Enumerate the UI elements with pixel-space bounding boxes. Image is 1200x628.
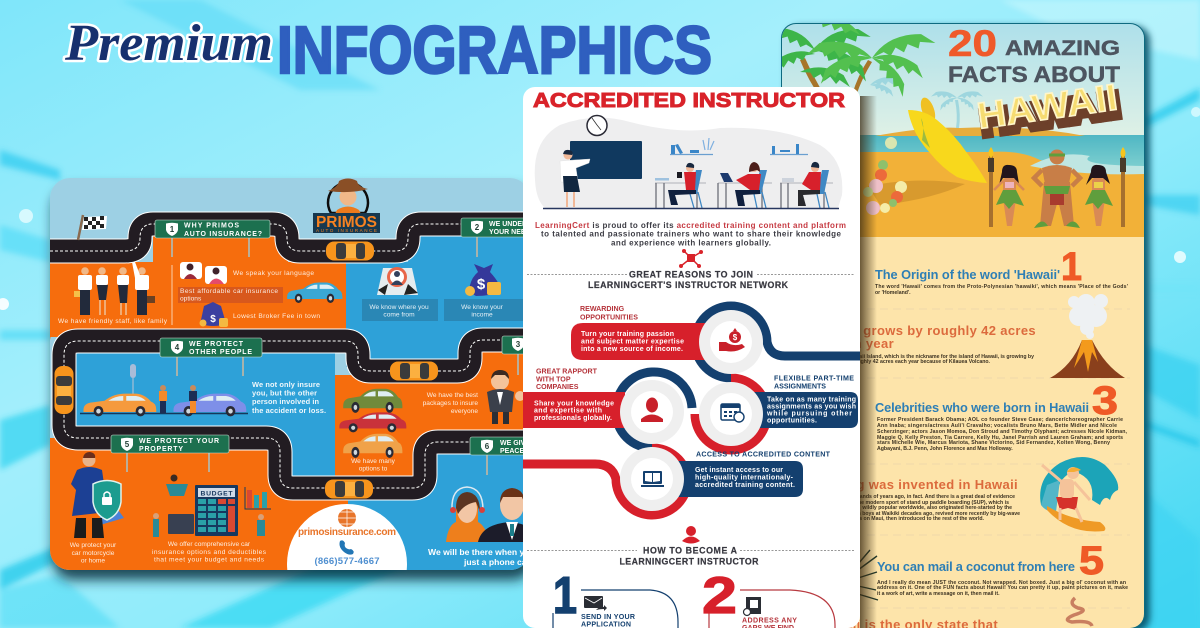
fact 3: Celebrities who were born in Hawaii <box>875 400 1089 415</box>
section heading: great reasons: GREAT REASONS TO JOIN <box>629 270 753 280</box>
caption: know your income <box>444 299 534 321</box>
superhero with shield <box>71 452 124 538</box>
sign 5: we protect your property <box>111 435 229 472</box>
fact 1 <box>875 252 1128 294</box>
sign 5: we protect your property: PROPERTY <box>139 446 183 453</box>
reason 1: rewarding opportunities: Turn your training passion <box>581 331 674 338</box>
fact 4: beach boys at Waikiki decades ago, revived more recently by big-wave <box>846 511 1020 517</box>
step 2: 2 <box>702 567 737 625</box>
fact 5: it a work of art, write a message on it, then mail it. <box>877 591 1000 597</box>
hula man <box>1034 150 1080 228</box>
sign 1: why Primos: AUTO INSURANCE? <box>184 231 262 238</box>
fact 3: Maggie Q, Kelly Preston, Tia Carrere, Kelly Hu, Janel Parrish and Lauren Graham; and sports <box>877 435 1123 441</box>
icon: parking sign <box>130 364 136 394</box>
section heading: how to become: LEARNINGCERT INSTRUCTOR <box>620 556 759 566</box>
reason 3: flexible part-time: assignments as you wish <box>767 404 856 410</box>
sea <box>860 135 1144 166</box>
student right <box>780 162 833 209</box>
colored blocks <box>50 235 540 575</box>
intro text <box>535 221 846 248</box>
sign 4: we protect other people <box>160 338 262 376</box>
flower lei <box>863 137 907 215</box>
icon: money bag <box>200 302 228 327</box>
reason 2: great rapport: GREAT RAPPORT <box>536 368 598 376</box>
icon: income bag: $ <box>477 276 486 293</box>
step 2: ADDRESS ANY <box>742 616 797 624</box>
icon: language avatars <box>180 262 227 284</box>
reason 1: rewarding opportunities: REWARDING <box>580 305 625 313</box>
fact 3: Agbayani, B.J. Penn, John Florence and Max Holloway. <box>877 446 1013 452</box>
icon: checkered flag <box>78 215 107 240</box>
fact 1: 1 <box>1061 245 1082 289</box>
benefits text <box>178 270 320 320</box>
panel: Hawaii facts <box>765 13 1144 628</box>
support caption: We will be there when you need us, <box>428 547 572 557</box>
Hawaii 3D lettering: HAWAII <box>978 84 1123 144</box>
website and phone badge: primosinsurance.com <box>298 527 396 538</box>
staff group <box>74 262 155 315</box>
options text: We have many <box>351 458 396 465</box>
section heading: great reasons <box>527 270 855 290</box>
other people text: We not only insure <box>252 380 320 389</box>
sign 3 <box>502 336 523 375</box>
icon: budget calculator <box>195 485 238 536</box>
fact 4 <box>860 480 1020 521</box>
sign 2: we understand your needs: YOUR NEEDS <box>489 229 536 236</box>
fact 1: or 'Homeland'. <box>875 290 911 296</box>
icon: surfer <box>1040 457 1118 532</box>
best packages text: everyone <box>451 408 478 415</box>
reason 1: rewarding opportunities: and subject matter expertise <box>581 338 684 346</box>
best packages text <box>423 392 478 415</box>
sand <box>860 152 1144 237</box>
budget caption: We offer comprehensive car <box>168 541 251 548</box>
icon: mail <box>584 596 607 611</box>
student left <box>655 163 706 209</box>
reason 2: great rapport: COMPANIES <box>536 383 579 391</box>
hero caption: car motorcycle <box>72 550 115 557</box>
section heading: great reasons: LEARNINGCERT'S INSTRUCTOR NETWORK <box>588 280 789 290</box>
logo: Primos auto insurance <box>313 178 380 233</box>
sign 2: we understand your needs <box>460 218 523 257</box>
fact 5: And I really do mean JUST the coconut. Not wrapped. Not boxed. Just a big ol' coconut with an <box>877 580 1126 586</box>
budget chart and people <box>153 474 271 537</box>
fact 4: that the modern sport of stand up paddle boarding (SUP), which is <box>845 500 1009 506</box>
icon: phone <box>340 540 354 555</box>
panel: accredited instructor <box>510 87 870 628</box>
other people text <box>252 380 326 415</box>
car options <box>339 389 406 458</box>
sign 6: we give you peace of mind: WE GIVE YOU <box>500 440 547 447</box>
other people text: person involved in <box>252 397 319 406</box>
tiki torches <box>988 147 1126 227</box>
reason 4: access to content: accredited training content. <box>695 482 795 489</box>
sign 4: we protect other people: WE PROTECT <box>189 341 244 348</box>
fact 4: wildly popular worldwide, also originated here-started by the <box>861 505 1012 511</box>
distant palms <box>870 77 983 128</box>
benefits text: We speak your language <box>233 270 314 277</box>
fact 5 <box>877 546 1128 596</box>
icon: person divider <box>682 526 700 544</box>
reason 3: flexible part-time <box>699 374 858 446</box>
website and phone badge <box>287 504 407 624</box>
intro text: and experience with learners globally. <box>611 238 771 248</box>
section heading: how to become: HOW TO BECOME A <box>643 546 738 556</box>
fact 3 <box>876 386 1127 451</box>
shelves <box>670 138 808 154</box>
hero caption <box>70 542 117 564</box>
budget caption: insurance options and deductibles <box>152 549 267 556</box>
sign 6: we give you peace of mind: 6 <box>485 442 490 451</box>
sign 6: we give you peace of mind <box>470 436 523 475</box>
floor line <box>543 208 839 210</box>
options text <box>351 458 396 472</box>
fact 5: address on it. One of the FUN facts about Hawaii! You can pretty it up, paint pictures on it, make <box>877 585 1128 591</box>
reason 1: rewarding opportunities <box>571 305 763 374</box>
website and phone badge: (866)577-4667 <box>314 556 380 567</box>
sign 5: we protect your property: 5 <box>125 440 130 449</box>
sign 3: 3 <box>516 340 521 349</box>
icon: squiggle <box>1067 598 1092 626</box>
best packages text: We have the best <box>427 392 478 399</box>
fact 1: The word 'Hawaii' comes from the Proto-Polynesian 'hawaiki', which means 'Place of the Gods' <box>875 284 1128 290</box>
icon: calendar <box>721 404 744 422</box>
fact 2 <box>860 326 1036 364</box>
reason 2: great rapport: WITH TOP <box>536 376 571 384</box>
reason 4: access to content: high-quality internationaly- <box>695 474 794 482</box>
reason 3: flexible part-time: while pursuing other <box>766 410 852 418</box>
heading 20 amazing facts about: AMAZING <box>1005 37 1120 60</box>
fact 5: You can mail a coconut from here <box>877 559 1075 574</box>
hero caption: We protect your <box>70 542 117 549</box>
benefits text: Best affordable car insurance <box>180 288 278 295</box>
fact 1: The Origin of the word 'Hawaii' <box>875 267 1060 282</box>
logo: Primos auto insurance: AUTO INSURANCE <box>316 228 377 233</box>
cream facts area <box>848 237 1144 628</box>
caption: where you come from: come from <box>383 312 415 318</box>
caption: where you come from: We know where you <box>369 304 429 311</box>
icon: document search <box>744 597 761 616</box>
icon: person <box>641 398 663 422</box>
reason 4: access to content: ACCESS TO ACCREDITED CONTENT <box>696 450 831 458</box>
icon: budget calculator: BUDGET <box>200 490 233 498</box>
icon: network <box>679 249 703 268</box>
fact 3: stars Michelle Wie, Marcus Mariota, Shane Victorino, Sid Fernandez, Kolten Wong, Benny <box>877 440 1110 446</box>
section heading: how to become <box>527 546 855 566</box>
fact 3: Scherzinger; actors Jason Momoa, Don Stroud and Timothy Olyphant; actresses Nicole Kidman, <box>877 429 1128 435</box>
fact 4: Surfing was invented in Hawaii <box>817 477 1018 492</box>
reason 4: access to content: Get instant access to our <box>695 467 783 474</box>
sign 2: we understand your needs: 2 <box>475 223 480 232</box>
reason 2: great rapport: professionals globally. <box>534 415 612 422</box>
sign 2: we understand your needs: WE UNDERSTAND <box>489 221 551 228</box>
icon: laptop book <box>641 471 664 487</box>
sign 5: we protect your property: WE PROTECT YOUR <box>139 438 219 445</box>
budget caption <box>152 541 267 564</box>
fact 3: 3 <box>1092 379 1118 423</box>
options text: options to <box>359 466 388 472</box>
icon: volcano <box>1050 294 1125 378</box>
fact 2: each year <box>831 336 894 351</box>
fact 4: surfers on Maui, then introduced to the rest of the world. <box>844 516 985 522</box>
fact 5: 5 <box>1079 539 1104 583</box>
step 1: SEND IN YOUR <box>581 613 635 621</box>
word INFOGRAPHICS: INFOGRAPHICS <box>277 13 712 88</box>
reason 3: flexible part-time: FLEXIBLE PART-TIME <box>774 374 854 382</box>
fact 4: Thousands of years ago, in fact. And there is a great deal of evidence <box>844 494 1015 500</box>
heading 20 amazing facts about: FACTS ABOUT <box>948 62 1121 87</box>
best packages text: packages to insure <box>423 400 478 407</box>
surfboard <box>868 96 987 205</box>
road cars <box>54 242 438 498</box>
sign 1: why Primos: WHY PRIMOS <box>184 222 239 230</box>
classroom illustration <box>535 116 842 209</box>
intro text: to talented and passionate trainers who want to share their knowledge <box>541 230 842 238</box>
other people text: you, but the other <box>252 388 317 398</box>
heading 20 amazing facts about: 20 <box>948 23 997 64</box>
reason 2: great rapport <box>523 368 684 444</box>
icon: money bag: $ <box>210 314 216 325</box>
sky <box>782 24 1144 138</box>
reason 3: flexible part-time: ASSIGNMENTS <box>774 382 826 390</box>
sign 1: why Primos <box>155 220 270 257</box>
reasons connector ribbon <box>510 306 870 515</box>
Hawaii 3D lettering: HAWAII <box>975 76 1120 137</box>
staff caption: We have friendly staff, like family <box>58 318 168 325</box>
logo: Primos auto insurance: PRIMOS <box>316 214 377 231</box>
agent character <box>487 370 525 424</box>
palm trees <box>782 24 936 97</box>
icon: globe <box>338 509 356 527</box>
script word Premium: Premium <box>64 15 273 72</box>
fact 2: roughly 42 acres each year because of Kilauea Volcano. <box>852 359 991 365</box>
heading 20 amazing facts about <box>949 30 1120 82</box>
step 1 <box>545 567 678 628</box>
caption: where you come from <box>362 299 438 321</box>
title: Premium Infographics <box>64 13 712 88</box>
reason 4: access to content <box>620 447 831 511</box>
reason 2: great rapport: and expertise with <box>534 408 602 414</box>
road <box>40 224 540 488</box>
shadow cast by middle panel <box>860 96 877 628</box>
benefits text: Lowest Broker Fee in town <box>233 313 320 320</box>
icon: income bag <box>465 264 501 296</box>
reason 3: flexible part-time: opportunities. <box>767 418 817 424</box>
sign 4: we protect other people: OTHER PEOPLE <box>189 349 252 356</box>
sign 4: we protect other people: 4 <box>175 343 180 352</box>
sign 1: why Primos: 1 <box>170 225 175 234</box>
sign 6: we give you peace of mind: PEACE OF MIND <box>500 448 556 455</box>
hula dancer right <box>1085 165 1113 226</box>
divider <box>171 265 173 325</box>
hula dancer left <box>994 165 1024 226</box>
support caption <box>428 547 572 567</box>
reason 1: rewarding opportunities: OPPORTUNITIES <box>580 314 638 322</box>
icon: plant <box>858 550 878 600</box>
icon: blue car <box>287 282 342 303</box>
reason 3: flexible part-time: Take on as many training <box>767 396 856 404</box>
step 2 <box>700 567 835 628</box>
blackboard <box>570 141 642 179</box>
other people text: the accident or loss. <box>252 406 326 415</box>
caption: know your income: income <box>471 312 493 318</box>
fact 3: Ann Inaba; singers/actress Auli'i Cravalho; vocalists Bruno Mars, Bette Midler and Nicole <box>877 423 1117 429</box>
teacher <box>560 150 590 207</box>
intro text: LearningCert is proud to offer its accredited training content and platform <box>535 221 846 230</box>
island <box>875 127 1085 136</box>
reason 2: great rapport: Share your knowledge <box>534 400 614 408</box>
fact 2: Hawaii Island, which is the nickname for the island of Hawaii, is growing by <box>849 354 1034 360</box>
clock <box>587 116 607 136</box>
dashed separators <box>867 309 1130 608</box>
icon: map with pin <box>377 267 418 295</box>
student middle <box>718 162 772 209</box>
hero caption: or home <box>81 558 105 564</box>
icon: money hand: $ <box>733 333 738 342</box>
caption: know your income: We know your <box>461 304 504 311</box>
accident scene <box>80 385 248 416</box>
heading: ACCREDITED INSTRUCTOR <box>533 89 845 112</box>
fact 2: Hawaii grows by roughly 42 acres <box>816 323 1036 338</box>
icon: support agents <box>446 487 540 542</box>
budget caption: that meet your budget and needs <box>154 556 265 564</box>
panel: Primos auto insurance <box>43 178 523 590</box>
reason 1: rewarding opportunities: into a new source of income. <box>581 346 683 353</box>
support caption: just a phone call away <box>463 557 555 567</box>
fact 3: Former President Barack Obama; AOL co founder Steve Case; dancer/choreographer Carrie <box>877 417 1123 423</box>
benefits text: options <box>180 296 202 302</box>
step 1: 1 <box>553 567 577 625</box>
icon: money hand <box>719 328 745 352</box>
